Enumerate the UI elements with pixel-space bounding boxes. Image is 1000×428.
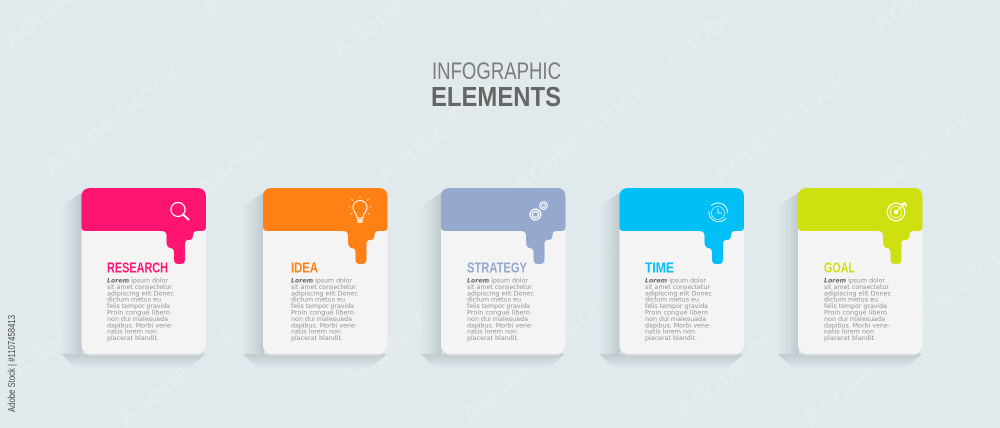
watermark pattern: Adobe Stock (705, 64, 855, 190)
title line 1: INFOGRAPHIC (432, 58, 561, 85)
card body (82, 188, 206, 356)
body text: adipiscing elit Donec (645, 289, 712, 297)
panel: time (600, 188, 744, 368)
body text: sit amet consectetur (467, 283, 532, 291)
body text: Proin congue libero (107, 308, 170, 316)
panel: research (62, 188, 206, 368)
icon: target (887, 203, 906, 221)
panel shadow (600, 192, 744, 368)
body text: dictum metus eu (824, 296, 878, 304)
body text: placerat blandit. (291, 334, 343, 342)
body text: non dui malesuada (824, 315, 885, 323)
watermark pattern: Adobe Stock (370, 64, 520, 190)
body text: Lorem ipsum dolor (645, 276, 706, 284)
body text: adipiscing elit Donec (824, 289, 891, 297)
body text: sit amet consectetur (645, 283, 710, 291)
color header with drip (263, 188, 388, 264)
body text: Proin congue libero (824, 308, 887, 316)
card body (798, 188, 922, 356)
panel shadow (778, 192, 922, 368)
body text: placerat blandit. (824, 334, 876, 342)
body text: natis lorem non (107, 328, 157, 336)
body text: felis tempor gravida (645, 302, 708, 310)
body text: non dui malesuada (645, 315, 706, 323)
body text: sit amet consectetur (107, 283, 172, 291)
body text: placerat blandit. (467, 334, 519, 342)
panel: idea (243, 188, 388, 368)
body text (107, 276, 174, 342)
body text: adipiscing elit Donec (107, 289, 174, 297)
heading: TIME (645, 260, 674, 276)
body text: felis tempor gravida (467, 302, 530, 310)
watermark pattern: Adobe (190, 129, 275, 205)
panel: goal (778, 188, 922, 368)
heading: IDEA (291, 260, 318, 276)
icon: magnifier (171, 202, 188, 220)
watermark pattern: Adobe Stock (37, 57, 187, 183)
body text (645, 276, 712, 342)
watermark pattern: Adobe Stock (505, 74, 655, 200)
icon: gears (530, 202, 547, 220)
body text: natis lorem non (467, 328, 517, 336)
color header with drip (798, 188, 922, 264)
body text: Lorem ipsum dolor (107, 276, 168, 284)
body text: natis lorem non (645, 328, 695, 336)
body text: non dui malesuada (291, 315, 352, 323)
panel shadow (421, 192, 565, 368)
watermark pattern: Adobe Stock (335, 269, 485, 395)
watermark pattern: Adobe Stock (830, 104, 980, 230)
body text (467, 276, 534, 342)
color header with drip (82, 188, 206, 264)
color header with drip (441, 188, 566, 264)
card body (263, 188, 388, 356)
body text: non dui malesuada (107, 315, 168, 323)
body text: dapibus. Morbi vene- (467, 321, 534, 329)
heading: GOAL (824, 260, 855, 276)
heading: RESEARCH (107, 260, 168, 276)
body text (824, 276, 891, 342)
card body (441, 188, 566, 356)
panel shadow (243, 192, 387, 368)
body text: dictum metus eu (645, 296, 699, 304)
body text: felis tempor gravida (291, 302, 354, 310)
panel shadow (62, 192, 206, 368)
panel: strategy (421, 188, 566, 368)
body text: Proin congue libero (291, 308, 354, 316)
icon: clock cycle (709, 203, 728, 222)
watermark pattern: Adobe Stock (668, 299, 818, 425)
body text: placerat blandit. (645, 334, 697, 342)
body text: Lorem ipsum dolor (291, 276, 352, 284)
title line 2: ELEMENTS (431, 81, 561, 112)
body text: Proin congue libero (645, 308, 708, 316)
body text: felis tempor gravida (824, 302, 887, 310)
body text: dictum metus eu (107, 296, 161, 304)
icon: light bulb (348, 196, 372, 222)
title (431, 58, 561, 112)
color header with drip (620, 188, 744, 264)
body text: Lorem ipsum dolor (467, 276, 528, 284)
body text: dapibus. Morbi vene- (645, 321, 712, 329)
body text: felis tempor gravida (107, 302, 170, 310)
body text: Lorem ipsum dolor (824, 276, 885, 284)
card body (620, 188, 744, 356)
watermark pattern: Adobe (540, 279, 625, 355)
body text: natis lorem non (824, 328, 874, 336)
body text: Proin congue libero (467, 308, 530, 316)
body text: sit amet consectetur (824, 283, 889, 291)
body text: placerat blandit. (107, 334, 159, 342)
stock credit: Adobe Stock | #1107458413 (7, 315, 18, 412)
body text: sit amet consectetur (291, 283, 356, 291)
watermark pattern: Adobe (210, 279, 295, 355)
body text: dapibus. Morbi vene- (291, 321, 358, 329)
body text: dictum metus eu (291, 296, 345, 304)
body text: non dui malesuada (467, 315, 528, 323)
body text (291, 276, 358, 342)
body text: dictum metus eu (467, 296, 521, 304)
body text: dapibus. Morbi vene- (824, 321, 891, 329)
watermark pattern: Adobe (455, 354, 540, 428)
watermark pattern: Adobe (657, 0, 742, 75)
body text: adipiscing elit Donec (291, 289, 358, 297)
body text: dapibus. Morbi vene- (107, 321, 174, 329)
body text: natis lorem non (291, 328, 341, 336)
heading: STRATEGY (467, 260, 527, 276)
body text: adipiscing elit Donec (467, 289, 534, 297)
watermark pattern: Adobe Stock (5, 259, 155, 385)
